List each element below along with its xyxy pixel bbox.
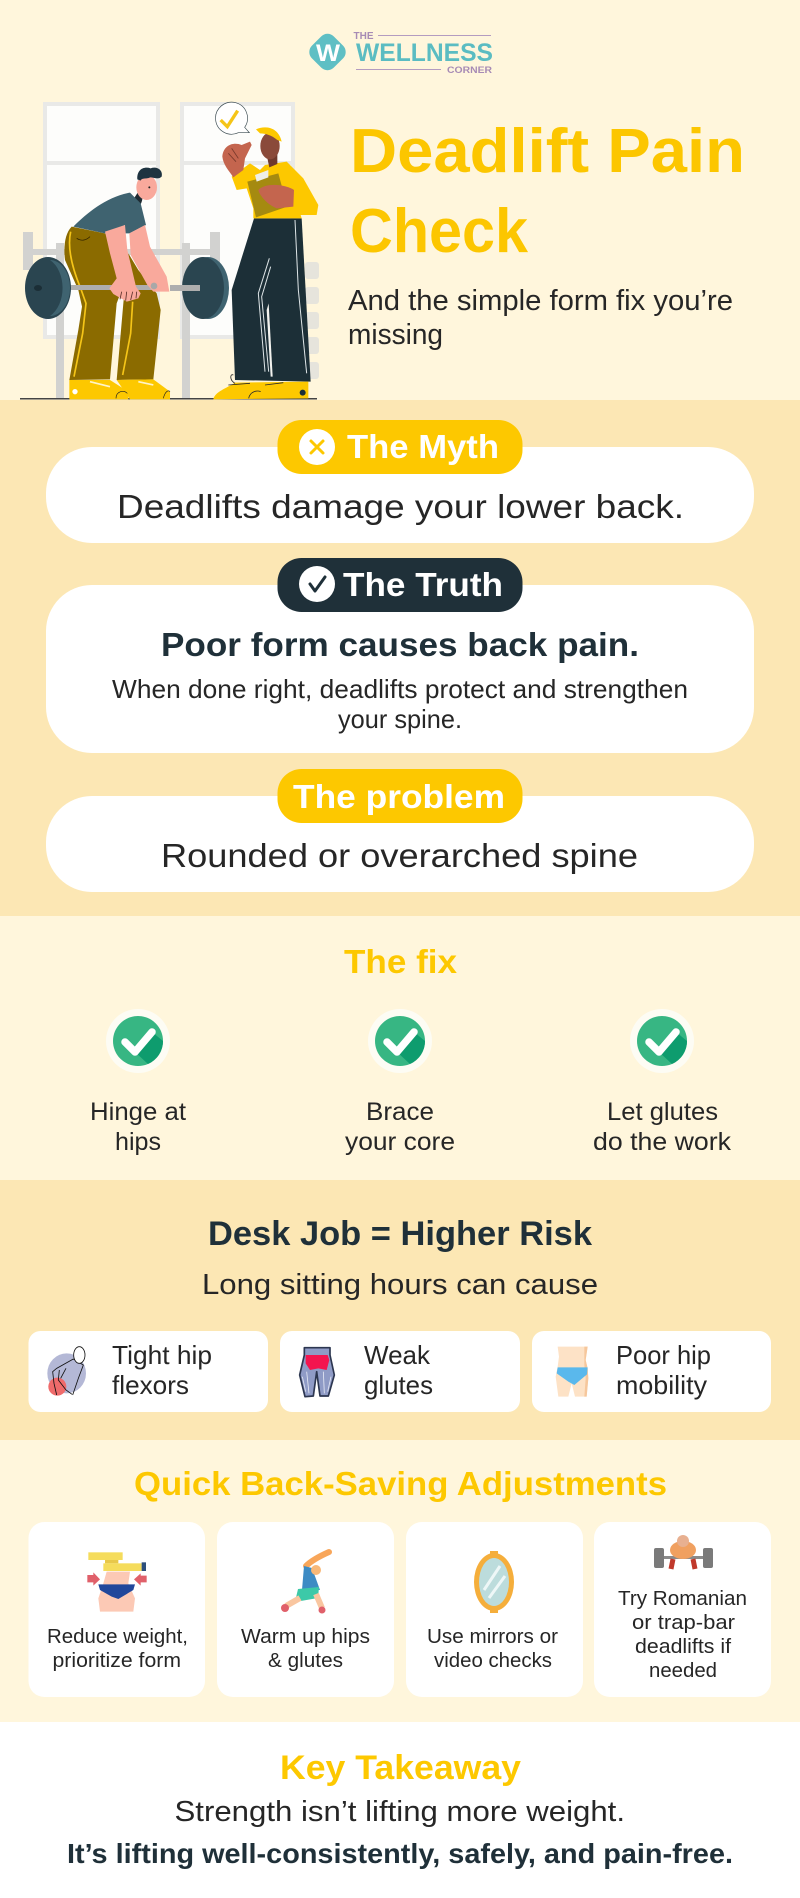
subtitle: And the simple form fix you’re	[348, 285, 733, 317]
card: alternative deadlifts: or trap-bar	[632, 1611, 735, 1634]
weight plates	[25, 257, 229, 319]
card: the myth	[46, 420, 754, 543]
card: the problem: The problem	[293, 778, 505, 815]
fix item: let glutes do the work: do the work	[593, 1128, 732, 1156]
heading: key takeaway: Key Takeaway	[280, 1749, 521, 1787]
card: alternative deadlifts	[594, 1522, 771, 1697]
fix item: hinge at hips: hips	[115, 1128, 161, 1156]
ground line	[20, 398, 317, 400]
risk card: poor hip mobility: mobility	[616, 1370, 707, 1400]
coach figure	[213, 102, 318, 399]
panel: the fix	[90, 943, 732, 1156]
icon: waist measure	[87, 1552, 147, 1612]
panel: key takeaway	[0, 1722, 800, 1898]
icon: hip flexor	[47, 1347, 86, 1396]
risk card: tight hip flexors: flexors	[112, 1370, 189, 1400]
card: alternative deadlifts: needed	[649, 1659, 717, 1682]
lifter figure	[64, 168, 170, 399]
subheading: Long sitting hours can cause	[202, 1269, 598, 1301]
squat rack	[23, 232, 220, 399]
heading: the fix: The fix	[344, 943, 458, 980]
logo: The Wellness Corner	[306, 30, 493, 76]
subtitle: missing	[348, 319, 443, 351]
heading: desk job: Desk Job = Higher Risk	[208, 1215, 592, 1253]
card: mirrors	[406, 1522, 583, 1697]
card: mirrors: Use mirrors or	[427, 1625, 558, 1648]
fix item: hinge at hips: Hinge at	[90, 1098, 186, 1126]
card: mirrors: video checks	[434, 1649, 552, 1672]
fix item: hinge at hips	[90, 1009, 186, 1156]
takeaway emphasis: It’s lifting well-consistently, safely, and pain-free.	[67, 1838, 733, 1869]
card: alternative deadlifts: deadlifts if	[635, 1635, 731, 1658]
logo: The Wellness Corner: WELLNESS	[356, 39, 493, 67]
risk card: tight hip flexors: Tight hip	[112, 1340, 212, 1370]
card: reduce weight	[28, 1522, 205, 1697]
card: the truth	[46, 558, 754, 753]
icon: mirror	[474, 1551, 514, 1613]
card: reduce weight: prioritize form	[52, 1649, 181, 1672]
card: the myth: Deadlifts damage your lower back.	[117, 488, 684, 525]
icon: stretching figure	[281, 1552, 329, 1614]
card: the truth: When done right, deadlifts protect and strengthen	[112, 674, 688, 704]
card: the problem	[46, 769, 754, 892]
card: warm up	[217, 1522, 394, 1697]
risk card: poor hip mobility	[532, 1331, 771, 1412]
logo: The Wellness Corner: W	[316, 40, 340, 67]
card: the truth: The Truth	[343, 566, 503, 603]
card: warm up: & glutes	[268, 1649, 343, 1672]
card: the problem: Rounded or overarched spine	[161, 837, 638, 874]
background windows	[45, 104, 319, 379]
logo: The Wellness Corner: THE	[354, 31, 374, 42]
card: reduce weight: Reduce weight,	[47, 1625, 188, 1648]
icon: barbell lifter	[654, 1535, 713, 1569]
panel: quick back-saving adjustments	[28, 1465, 771, 1697]
risk card: tight hip flexors	[28, 1331, 268, 1412]
panel: myth, truth, problem	[0, 400, 800, 916]
fix item: let glutes do the work	[593, 1009, 732, 1156]
risk card: weak glutes	[280, 1331, 520, 1412]
logo: The Wellness Corner: CORNER	[447, 65, 492, 76]
fix item: brace your core: your core	[345, 1128, 455, 1156]
heading: adjustments: Quick Back-Saving Adjustments	[134, 1465, 667, 1502]
title	[350, 117, 745, 266]
card: alternative deadlifts: Try Romanian	[618, 1587, 747, 1610]
icon: glutes	[300, 1348, 334, 1397]
icon: hips	[556, 1347, 588, 1397]
takeaway line: Strength isn’t lifting more weight.	[174, 1796, 625, 1828]
card: the truth: Poor form causes back pain.	[161, 626, 639, 663]
risk card: poor hip mobility: Poor hip	[616, 1340, 711, 1370]
hero illustration: two figures and gym background	[20, 102, 319, 400]
card: the truth: your spine.	[338, 704, 462, 734]
subtitle	[348, 285, 733, 351]
risk card: weak glutes: glutes	[364, 1370, 433, 1400]
panel: desk job risk	[0, 1180, 800, 1440]
risk card: weak glutes: Weak	[364, 1340, 431, 1370]
card: the myth: The Myth	[347, 428, 499, 465]
title: Deadlift Pain	[350, 117, 745, 186]
fix item: brace your core: Brace	[366, 1098, 434, 1126]
fix item: let glutes do the work: Let glutes	[607, 1098, 718, 1126]
card: warm up: Warm up hips	[241, 1625, 370, 1648]
title: Check	[350, 197, 528, 266]
fix item: brace your core	[345, 1009, 455, 1156]
